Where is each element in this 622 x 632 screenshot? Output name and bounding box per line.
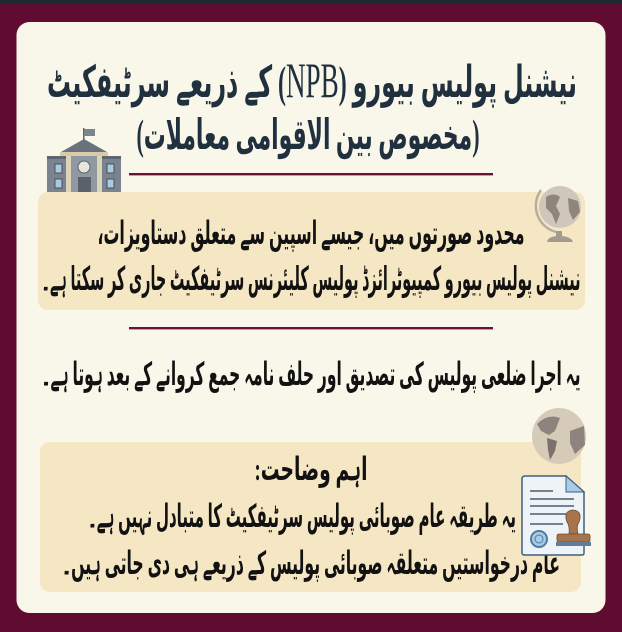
first note text (42, 215, 580, 299)
panel: important note (40, 442, 581, 592)
icon: certificate with stamp (522, 476, 591, 555)
icon: world globe (532, 408, 586, 464)
important note text: اہم وضاحت: (254, 451, 368, 488)
icon: government building (47, 128, 121, 198)
title (47, 52, 577, 160)
icon: desk globe (536, 186, 581, 242)
important note text (62, 451, 560, 582)
panel: first note (38, 192, 585, 310)
